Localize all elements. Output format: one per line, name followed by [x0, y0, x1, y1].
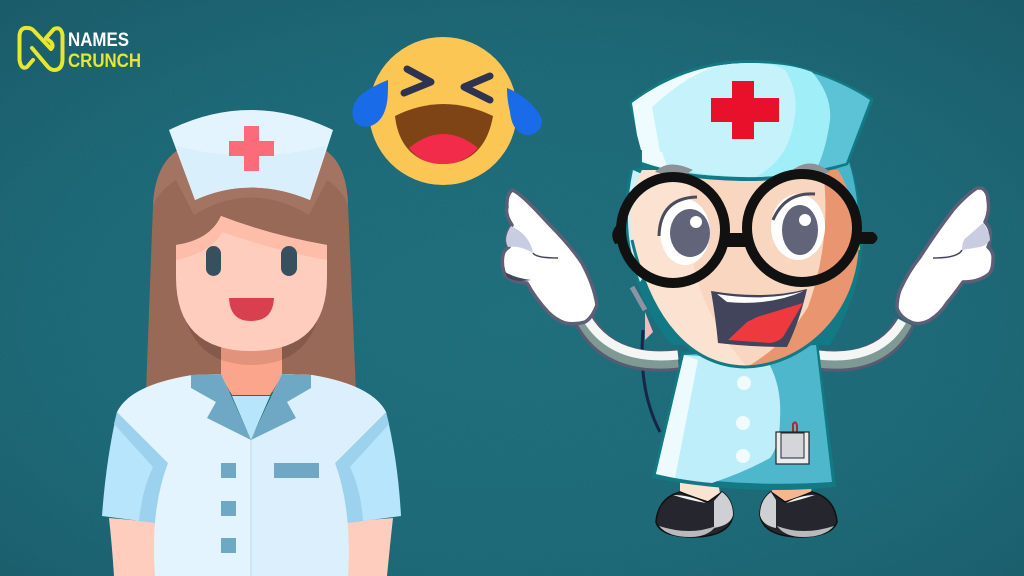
doctor gown	[652, 342, 836, 490]
nurse sleeves	[102, 412, 401, 523]
left nurse illustration	[102, 110, 401, 576]
doctor glasses	[612, 164, 878, 283]
nurse face shadow	[179, 280, 324, 365]
emoji tears	[352, 80, 388, 127]
nurse undershirt	[232, 396, 270, 440]
doctor arms	[583, 317, 905, 361]
logo: Names Crunch	[20, 28, 141, 72]
nurse cap	[169, 110, 333, 200]
hat red cross	[711, 81, 779, 139]
emoji tongue	[409, 134, 478, 164]
gown buttons	[736, 376, 751, 463]
doctor shoes	[656, 482, 837, 537]
nurse collar	[191, 374, 311, 440]
nurse eyes	[206, 246, 297, 276]
gown badge	[776, 422, 809, 464]
logo wordmark CRUNCH: CRUNCH	[68, 51, 141, 72]
nurse face	[176, 216, 327, 351]
stethoscope tube	[642, 330, 660, 432]
laughing emoji	[352, 37, 542, 185]
left glove	[502, 190, 597, 324]
doctor hat	[629, 60, 874, 181]
doctor face	[625, 165, 865, 370]
right eye	[771, 194, 825, 260]
logo mark	[20, 28, 62, 70]
doctor hood	[625, 150, 863, 345]
cartoon doctor illustration	[502, 60, 993, 537]
left eye	[659, 197, 710, 265]
doctor mouth	[711, 289, 807, 347]
stethoscope ear piece	[632, 287, 653, 340]
emoji face	[369, 37, 517, 185]
logo wordmark NAMES: NAMES	[68, 30, 129, 51]
nurse cap red cross	[229, 126, 274, 171]
right glove	[897, 188, 993, 324]
nurse shirt	[117, 374, 386, 576]
nurse arms	[109, 518, 393, 576]
nurse hair	[146, 150, 356, 392]
emoji mouth	[395, 104, 493, 164]
nurse mouth	[229, 298, 274, 321]
emoji eyes	[404, 69, 490, 100]
nurse buttons and pocket	[221, 463, 319, 553]
nurse neck	[221, 345, 282, 395]
